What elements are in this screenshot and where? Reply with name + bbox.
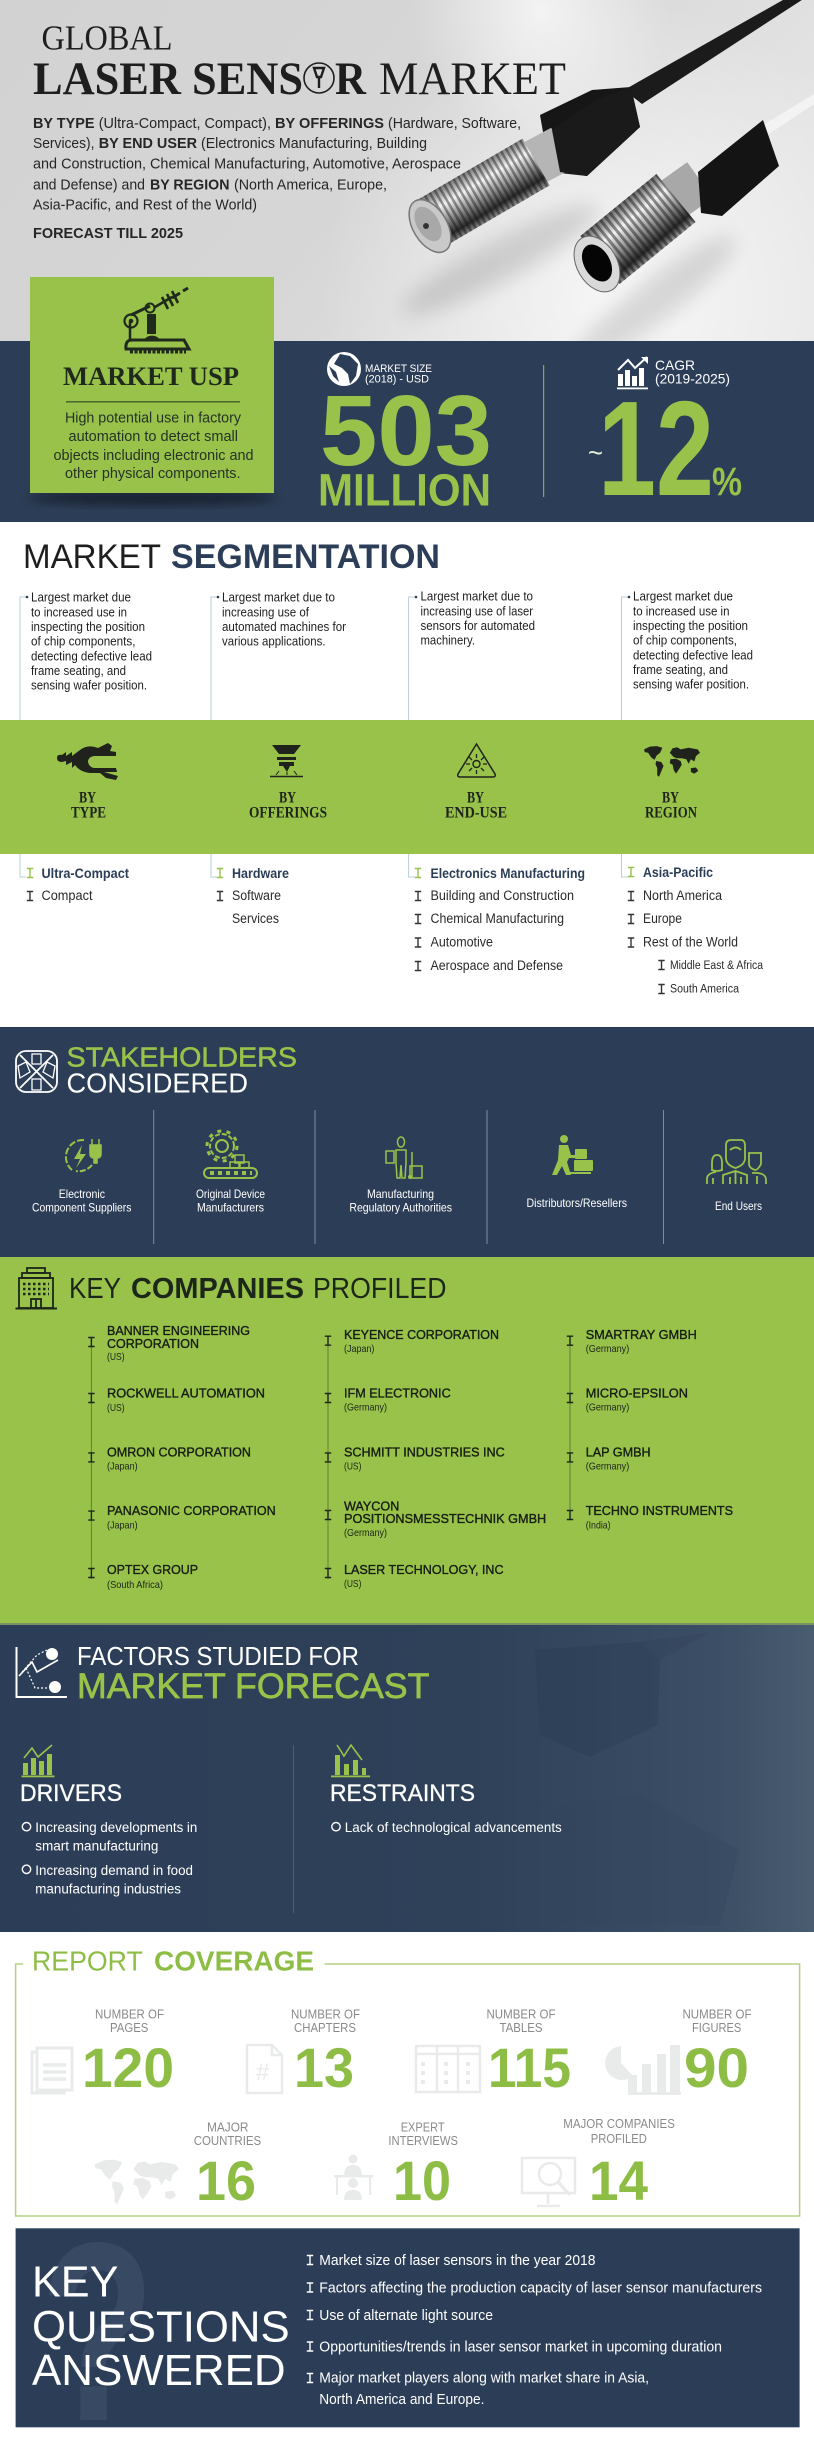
label: by region: BY	[662, 790, 679, 807]
segment descriptions: of chip components,	[633, 634, 737, 648]
stat: number of figures: FIGURES	[692, 2021, 741, 2035]
heading	[77, 1641, 429, 1706]
segment band	[0, 720, 814, 854]
panel: drivers	[20, 1745, 197, 1897]
CAGR value: ~	[588, 437, 603, 468]
label: by region: REGION	[645, 805, 697, 822]
list: end-use segments: Electronics Manufacturing	[430, 866, 585, 881]
market size label: (2018) - USD	[365, 374, 429, 386]
description text: BY TYPE	[33, 115, 94, 132]
restraints list: Lack of technological advancements	[345, 1820, 562, 1835]
company list: column 1: CORPORATION	[107, 1336, 199, 1351]
company list: column 2: (US)	[344, 1578, 361, 1590]
heading: FACTORS STUDIED FOR	[77, 1641, 359, 1671]
heading	[69, 1273, 446, 1305]
stakeholder: manufacturing regulatory authorities	[349, 1137, 452, 1214]
description text: Asia-Pacific, and Rest of the World)	[33, 197, 257, 214]
list: region segments: Asia-Pacific	[643, 865, 713, 880]
list: type segments	[27, 866, 129, 903]
stakeholder: end users: End Users	[715, 1199, 762, 1213]
heading: CONSIDERED	[66, 1068, 248, 1099]
panel: restraints	[330, 1745, 562, 1835]
market size label: MARKET SIZE	[365, 363, 432, 375]
list: offerings segments: Hardware	[232, 866, 289, 881]
stat: number of chapters: #	[256, 2059, 270, 2086]
segment descriptions: Largest market due to	[420, 590, 533, 604]
list: region segments: North America	[643, 888, 722, 903]
heading	[32, 2258, 290, 2395]
segment descriptions: automated machines for	[222, 620, 346, 634]
description text: (Ultra-Compact, Compact),	[99, 115, 271, 132]
stat: major companies profiled: MAJOR COMPANIES	[563, 2117, 675, 2131]
market size value: MILLION	[318, 464, 491, 515]
heading: REPORT	[32, 1946, 143, 1977]
company list: column 1: OPTEX GROUP	[107, 1562, 198, 1577]
list: region segments: South America	[670, 984, 740, 996]
company list: column 2	[344, 1327, 546, 1590]
company list: column 1: (US)	[107, 1351, 125, 1363]
company list: column 2: POSITIONSMESSTECHNIK GMBH	[344, 1511, 546, 1526]
stat: number of pages: NUMBER OF	[95, 2008, 164, 2022]
icon: by type laser	[57, 743, 118, 780]
company list: column 1: PANASONIC CORPORATION	[107, 1503, 276, 1518]
question list: Factors affecting the production capacity of laser sensor manufacturers	[319, 2280, 762, 2297]
drivers list: Increasing developments in	[35, 1820, 197, 1835]
label: by type	[71, 790, 106, 822]
heading: QUESTIONS	[32, 2303, 290, 2352]
company list: column 2: IFM ELECTRONIC	[344, 1386, 451, 1401]
panel: report coverage	[16, 1946, 800, 2216]
title: LASER SENS	[33, 53, 303, 105]
USP text: other physical components.	[65, 466, 240, 482]
stat: number of tables: 115	[488, 2036, 571, 2099]
photo: two laser sensors	[393, 0, 814, 377]
company list: column 1: (Japan)	[107, 1520, 138, 1532]
description text: Services),	[33, 135, 94, 152]
stat: number of pages: PAGES	[110, 2021, 148, 2035]
panel: market USP	[30, 277, 274, 493]
segment descriptions: Largest market due	[31, 591, 131, 605]
stakeholder: end users	[707, 1140, 766, 1213]
panel: key questions answered	[16, 2190, 800, 2441]
stat: number of chapters	[247, 2008, 360, 2099]
stakeholder: original device manufacturers	[196, 1131, 265, 1214]
description text: and Defense) and	[33, 176, 145, 193]
segment descriptions: frame seating, and	[633, 663, 728, 677]
question list: Major market players along with market share in Asia,	[319, 2370, 649, 2387]
description text: BY REGION	[150, 176, 230, 193]
heading: restraints: RESTRAINTS	[330, 1780, 475, 1807]
company list: column 2: (Japan)	[344, 1343, 374, 1355]
stakeholder: distributors and resellers: Distributors/Resellers	[526, 1196, 627, 1210]
description text: and Construction, Chemical Manufacturing, Automotive, Aerospace	[33, 156, 461, 173]
segment descriptions: machinery.	[420, 634, 475, 648]
icon: robot arm	[124, 288, 189, 352]
list: end-use segments: Aerospace and Defense	[430, 958, 563, 973]
stakeholder: manufacturing regulatory authorities: Manufacturing	[367, 1187, 434, 1201]
icon: office building	[16, 1268, 57, 1308]
description text: FORECAST TILL 2025	[33, 225, 183, 242]
panel: factors studied for market forecast	[0, 1625, 814, 1932]
label: by offerings: BY	[279, 790, 296, 807]
list: offerings segments: Services	[232, 911, 279, 926]
stat: major countries: COUNTRIES	[194, 2134, 261, 2148]
drivers list: smart manufacturing	[35, 1839, 158, 1854]
drivers list: manufacturing industries	[35, 1882, 181, 1897]
stakeholder: manufacturing regulatory authorities: Regulatory Authorities	[349, 1200, 452, 1214]
heading: SEGMENTATION	[171, 538, 440, 576]
panel: key companies profiled	[0, 1257, 814, 1625]
stat: major companies profiled	[522, 2117, 675, 2212]
question list: Use of alternate light source	[319, 2307, 493, 2324]
company list: column 3: SMARTRAY GMBH	[586, 1327, 697, 1342]
question list: Market size of laser sensors in the year 2018	[319, 2252, 596, 2269]
stat: major countries: 16	[196, 2149, 256, 2212]
title: MARKET	[379, 53, 566, 105]
icon: by end-use laser warning	[458, 744, 495, 777]
company list: column 1: (South Africa)	[107, 1579, 163, 1591]
CAGR label	[655, 357, 730, 387]
list: region segments	[628, 865, 764, 996]
company list: column 2: WAYCON	[344, 1499, 399, 1514]
segment descriptions: sensing wafer position.	[633, 678, 749, 692]
label: by end-use: BY	[467, 790, 484, 807]
USP text: High potential use in factory	[65, 411, 242, 427]
segment descriptions: of chip components,	[31, 635, 136, 649]
company list: column 2: SCHMITT INDUSTRIES INC	[344, 1445, 505, 1460]
stat: expert interviews: EXPERT	[401, 2121, 445, 2135]
segment descriptions: to increased use in	[31, 605, 127, 619]
CAGR label: CAGR	[655, 357, 695, 373]
list: region segments: Rest of the World	[643, 935, 738, 950]
stat: expert interviews: INTERVIEWS	[388, 2134, 458, 2148]
label: by region	[645, 790, 697, 822]
panel: key figures band	[0, 277, 814, 524]
heading: COMPANIES	[131, 1273, 304, 1305]
drivers list: Increasing demand in food	[35, 1863, 193, 1878]
CAGR value: %	[712, 460, 742, 504]
description text: (North America, Europe,	[234, 176, 387, 193]
list: type segments: Compact	[42, 888, 93, 903]
stat: major countries: MAJOR	[207, 2121, 248, 2135]
list: offerings segments: Software	[232, 888, 281, 903]
company list: column 3: (Germany)	[586, 1461, 629, 1473]
stat: expert interviews: 10	[393, 2149, 451, 2212]
company list: column 3: (Germany)	[586, 1402, 629, 1414]
icon: drivers chart	[22, 1745, 54, 1777]
heading	[32, 1946, 314, 1977]
question list	[307, 2252, 762, 2408]
drivers list	[22, 1820, 197, 1897]
company list: column 1: (US)	[107, 1402, 125, 1414]
stat: number of tables: NUMBER OF	[486, 2008, 556, 2022]
list: offerings segments	[217, 866, 289, 926]
stat: number of figures: 90	[684, 2036, 749, 2099]
stat: major companies profiled: 14	[589, 2149, 648, 2212]
icon: by offerings nozzle	[270, 745, 303, 776]
heading: KEY	[32, 2258, 118, 2307]
segment descriptions: inspecting the position	[633, 619, 748, 633]
segment descriptions: to increased use in	[633, 604, 730, 618]
description text: (Electronics Manufacturing, Building	[201, 135, 427, 152]
stakeholder: distributors and resellers	[526, 1135, 627, 1210]
CAGR label: (2019-2025)	[655, 371, 730, 387]
company list: column 1: BANNER ENGINEERING	[107, 1323, 250, 1338]
USP text: automation to detect small	[68, 429, 238, 445]
stat: number of pages: 120	[82, 2036, 174, 2099]
company list: column 1: ROCKWELL AUTOMATION	[107, 1386, 265, 1401]
segment descriptions: sensing wafer position.	[31, 679, 147, 693]
market size value: 503	[320, 375, 492, 487]
market size label	[365, 363, 432, 386]
company list: column 2: (US)	[344, 1461, 361, 1473]
icon: forecast chart	[16, 1647, 67, 1697]
company list: column 3	[586, 1327, 733, 1532]
stakeholder: electronic component suppliers: Electronic	[59, 1187, 105, 1201]
icon: by region world map	[644, 746, 700, 777]
stat: expert interviews	[334, 2121, 458, 2212]
heading: KEY	[69, 1273, 121, 1305]
company list: column 2: (Germany)	[344, 1402, 387, 1414]
label: by type: BY	[79, 790, 96, 807]
company list: column 3: TECHNO INSTRUMENTS	[586, 1503, 733, 1518]
company list: column 3: MICRO-EPSILON	[586, 1386, 688, 1401]
company list: column 3: (India)	[586, 1520, 611, 1532]
list: region segments: Middle East & Africa	[670, 960, 764, 972]
stakeholder: original device manufacturers: Manufacturers	[197, 1200, 264, 1214]
segment descriptions: various applications.	[222, 635, 326, 649]
stat: number of figures: NUMBER OF	[682, 2008, 752, 2022]
heading: COVERAGE	[154, 1946, 314, 1977]
heading: ANSWERED	[32, 2346, 286, 2395]
stat: number of chapters: CHAPTERS	[294, 2021, 356, 2035]
heading: STAKEHOLDERS	[66, 1042, 297, 1073]
segment descriptions: increasing use of laser	[420, 604, 533, 618]
stat: number of chapters: 13	[294, 2036, 354, 2099]
list: region segments: Europe	[643, 911, 682, 926]
description text: BY END USER	[99, 135, 197, 152]
stakeholder: electronic component suppliers: Component Suppliers	[32, 1200, 131, 1214]
segment descriptions: Largest market due to	[222, 591, 335, 605]
list: end-use segments: Building and Construction	[430, 888, 574, 903]
company list: column 2: KEYENCE CORPORATION	[344, 1327, 499, 1342]
CAGR value: 12	[598, 373, 714, 524]
stat: major countries	[95, 2121, 261, 2212]
description text	[33, 115, 521, 242]
segment descriptions: detecting defective lead	[633, 648, 753, 662]
title: GLOBAL	[42, 19, 172, 58]
heading: MARKET	[23, 538, 161, 576]
panel: market segmentation	[0, 538, 814, 996]
label: by end-use: END-USE	[445, 805, 507, 822]
title	[33, 19, 566, 105]
panel: stakeholders considered	[0, 1027, 814, 1257]
segment descriptions: frame seating, and	[31, 664, 126, 678]
company list: column 2: (Germany)	[344, 1527, 387, 1539]
segment descriptions	[31, 590, 753, 693]
company list: column 3: LAP GMBH	[586, 1445, 651, 1460]
segment descriptions: sensors for automated	[420, 619, 535, 633]
heading: PROFILED	[313, 1273, 446, 1305]
segment descriptions: detecting defective lead	[31, 649, 152, 663]
company list: column 1	[107, 1323, 276, 1591]
list: end-use segments: Chemical Manufacturing	[430, 911, 564, 926]
heading	[66, 1042, 297, 1099]
icon: globe	[327, 352, 361, 386]
stat: number of pages	[32, 2008, 174, 2099]
segment descriptions: inspecting the position	[31, 620, 145, 634]
icon: laser O in title	[304, 63, 334, 93]
heading: drivers: DRIVERS	[20, 1780, 122, 1807]
stat: number of chapters: NUMBER OF	[291, 2008, 360, 2022]
stakeholder: electronic component suppliers	[32, 1139, 131, 1214]
label: by offerings	[249, 790, 327, 822]
description text: BY OFFERINGS	[275, 115, 384, 132]
stat: number of figures	[605, 2008, 752, 2099]
company list: column 3: (Germany)	[586, 1343, 629, 1355]
label: by offerings: OFFERINGS	[249, 805, 327, 822]
stat: number of tables	[416, 2008, 571, 2099]
list: type segments: Ultra-Compact	[42, 866, 129, 881]
heading: MARKET FORECAST	[77, 1667, 429, 1706]
question list: North America and Europe.	[319, 2391, 484, 2408]
title: R	[335, 53, 367, 105]
description text: (Hardware, Software,	[388, 115, 521, 132]
icon: stakeholders handshake	[16, 1051, 57, 1092]
label: by type: TYPE	[71, 805, 106, 822]
USP text: objects including electronic and	[54, 448, 254, 464]
USP text	[54, 411, 254, 482]
list: end-use segments	[415, 866, 585, 973]
label: by end-use	[445, 790, 507, 822]
heading	[23, 538, 440, 576]
heading: market USP: MARKET USP	[63, 362, 239, 391]
segment descriptions: increasing use of	[222, 605, 309, 619]
icon: CAGR chart	[617, 357, 648, 389]
stat: number of tables: TABLES	[500, 2021, 542, 2035]
company list: column 1: OMRON CORPORATION	[107, 1445, 251, 1460]
list: end-use segments: Automotive	[430, 935, 493, 950]
icon: restraints chart	[331, 1745, 370, 1777]
question list: Opportunities/trends in laser sensor market in upcoming duration	[319, 2339, 722, 2356]
segment descriptions: Largest market due	[633, 590, 733, 604]
panel: hero header	[0, 0, 814, 377]
stat: major companies profiled: PROFILED	[591, 2132, 647, 2146]
company list: column 2: LASER TECHNOLOGY, INC	[344, 1562, 504, 1577]
stakeholder: original device manufacturers: Original Device	[196, 1187, 265, 1201]
company list: column 1: (Japan)	[107, 1461, 138, 1473]
